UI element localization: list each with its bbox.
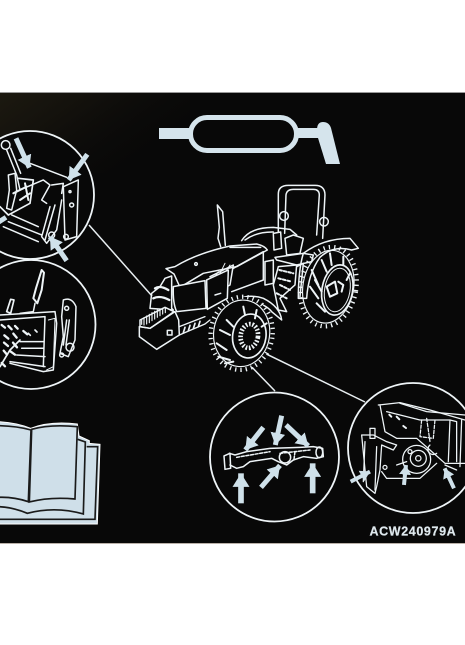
detail circle: rear hitch with arrows: [0, 131, 94, 261]
ROPS: [278, 185, 328, 238]
decal background: [0, 92, 465, 544]
part number: ACW240979A: [370, 524, 456, 538]
detail circle: hitch frame: [0, 260, 96, 389]
detail circle: front end with arrows: [348, 383, 465, 513]
rear wheel: [294, 242, 363, 331]
fenders and seat: [242, 227, 358, 312]
front wheel: [206, 293, 282, 374]
detail circle: front axle with arrows: [210, 392, 339, 522]
icon: operator manual book: [0, 422, 100, 524]
arrows: [351, 465, 454, 488]
hood: [166, 244, 267, 312]
leader lines: [89, 225, 365, 402]
front grille: [139, 276, 210, 349]
icon: tractor: [139, 185, 363, 374]
arrows: [0, 138, 87, 261]
icon: muffler: [159, 118, 340, 164]
exhaust: [217, 205, 225, 247]
arrows: [241, 416, 313, 503]
